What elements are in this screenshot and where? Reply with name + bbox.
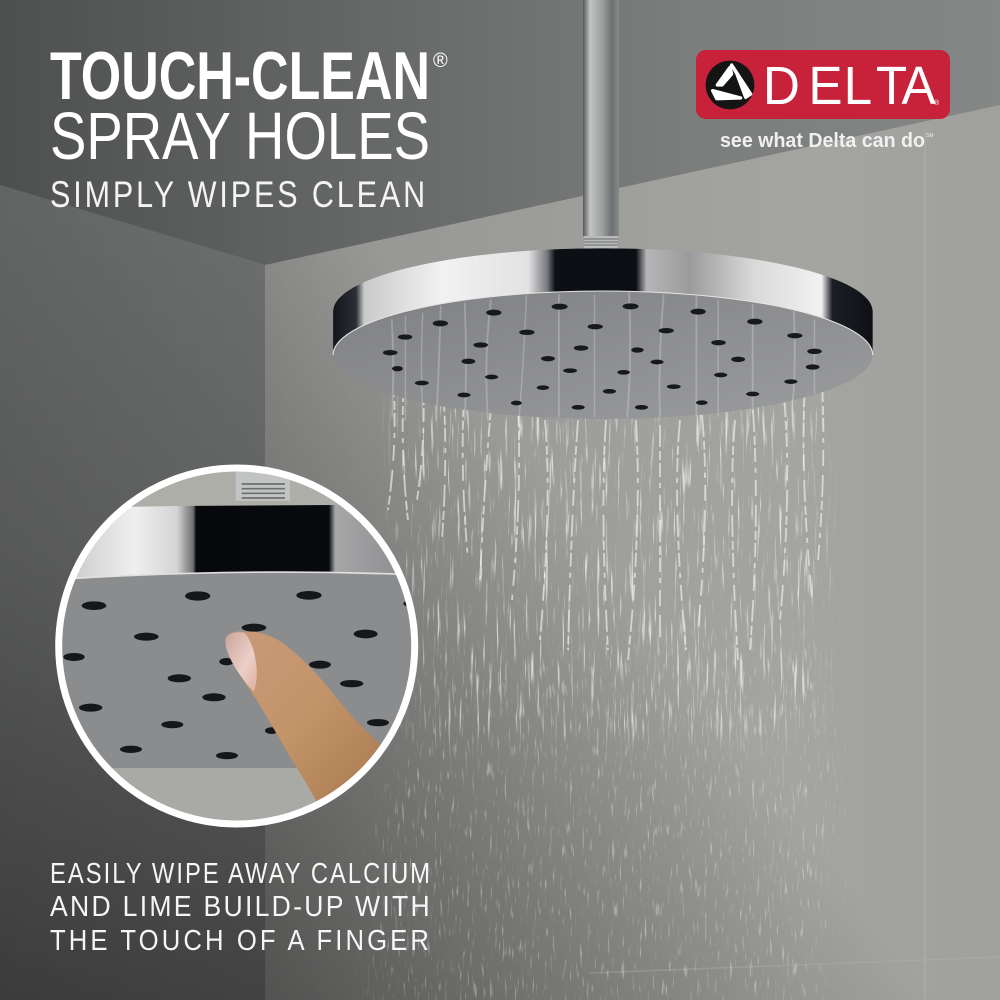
title line: Touch-Clean: TOUCH-CLEAN bbox=[50, 38, 430, 114]
circle: white ring bbox=[59, 468, 415, 824]
registered mark: ® bbox=[433, 50, 448, 72]
fingernail bbox=[225, 632, 257, 692]
chrome band bbox=[76, 505, 396, 578]
water spray bbox=[362, 390, 846, 1000]
logo: tagline: see what Delta can do bbox=[720, 130, 925, 152]
threaded connector bbox=[236, 470, 290, 501]
holes bbox=[63, 591, 413, 759]
title bbox=[50, 38, 448, 215]
logo: registered mark: ® bbox=[934, 99, 940, 107]
title line: Spray Holes: SPRAY HOLES bbox=[50, 99, 430, 174]
head: underside disc bbox=[333, 291, 873, 419]
finger bbox=[225, 631, 381, 802]
shower arm bbox=[583, 0, 619, 250]
caption line 2: AND LIME BUILD-UP WITH bbox=[50, 891, 432, 923]
underside with holes bbox=[50, 572, 420, 768]
head: water running over underside bbox=[392, 293, 814, 420]
shower head bbox=[333, 248, 873, 420]
head: rim highlight bbox=[333, 291, 873, 355]
wall behind head bbox=[112, 472, 340, 770]
logo: Delta bbox=[696, 50, 950, 152]
subtitle: SIMPLY WIPES CLEAN bbox=[50, 174, 428, 215]
circle: photo content bbox=[62, 472, 411, 820]
caption line 3: THE TOUCH OF A FINGER bbox=[50, 925, 432, 957]
logo: red badge bbox=[696, 50, 950, 119]
head: chrome band bbox=[333, 248, 873, 355]
logo: service mark: SM bbox=[926, 133, 934, 139]
caption bbox=[50, 858, 432, 957]
caption line 1: EASILY WIPE AWAY CALCIUM bbox=[50, 858, 432, 890]
underside edge highlight bbox=[50, 572, 420, 580]
water: streams below the head bbox=[388, 370, 823, 660]
logo: wordmark: DELTA bbox=[763, 56, 937, 116]
lower wall bbox=[113, 768, 380, 830]
zoomed detail circle bbox=[50, 460, 420, 830]
head: spray holes bbox=[383, 303, 822, 410]
logo: triangle emblem bbox=[706, 61, 754, 109]
